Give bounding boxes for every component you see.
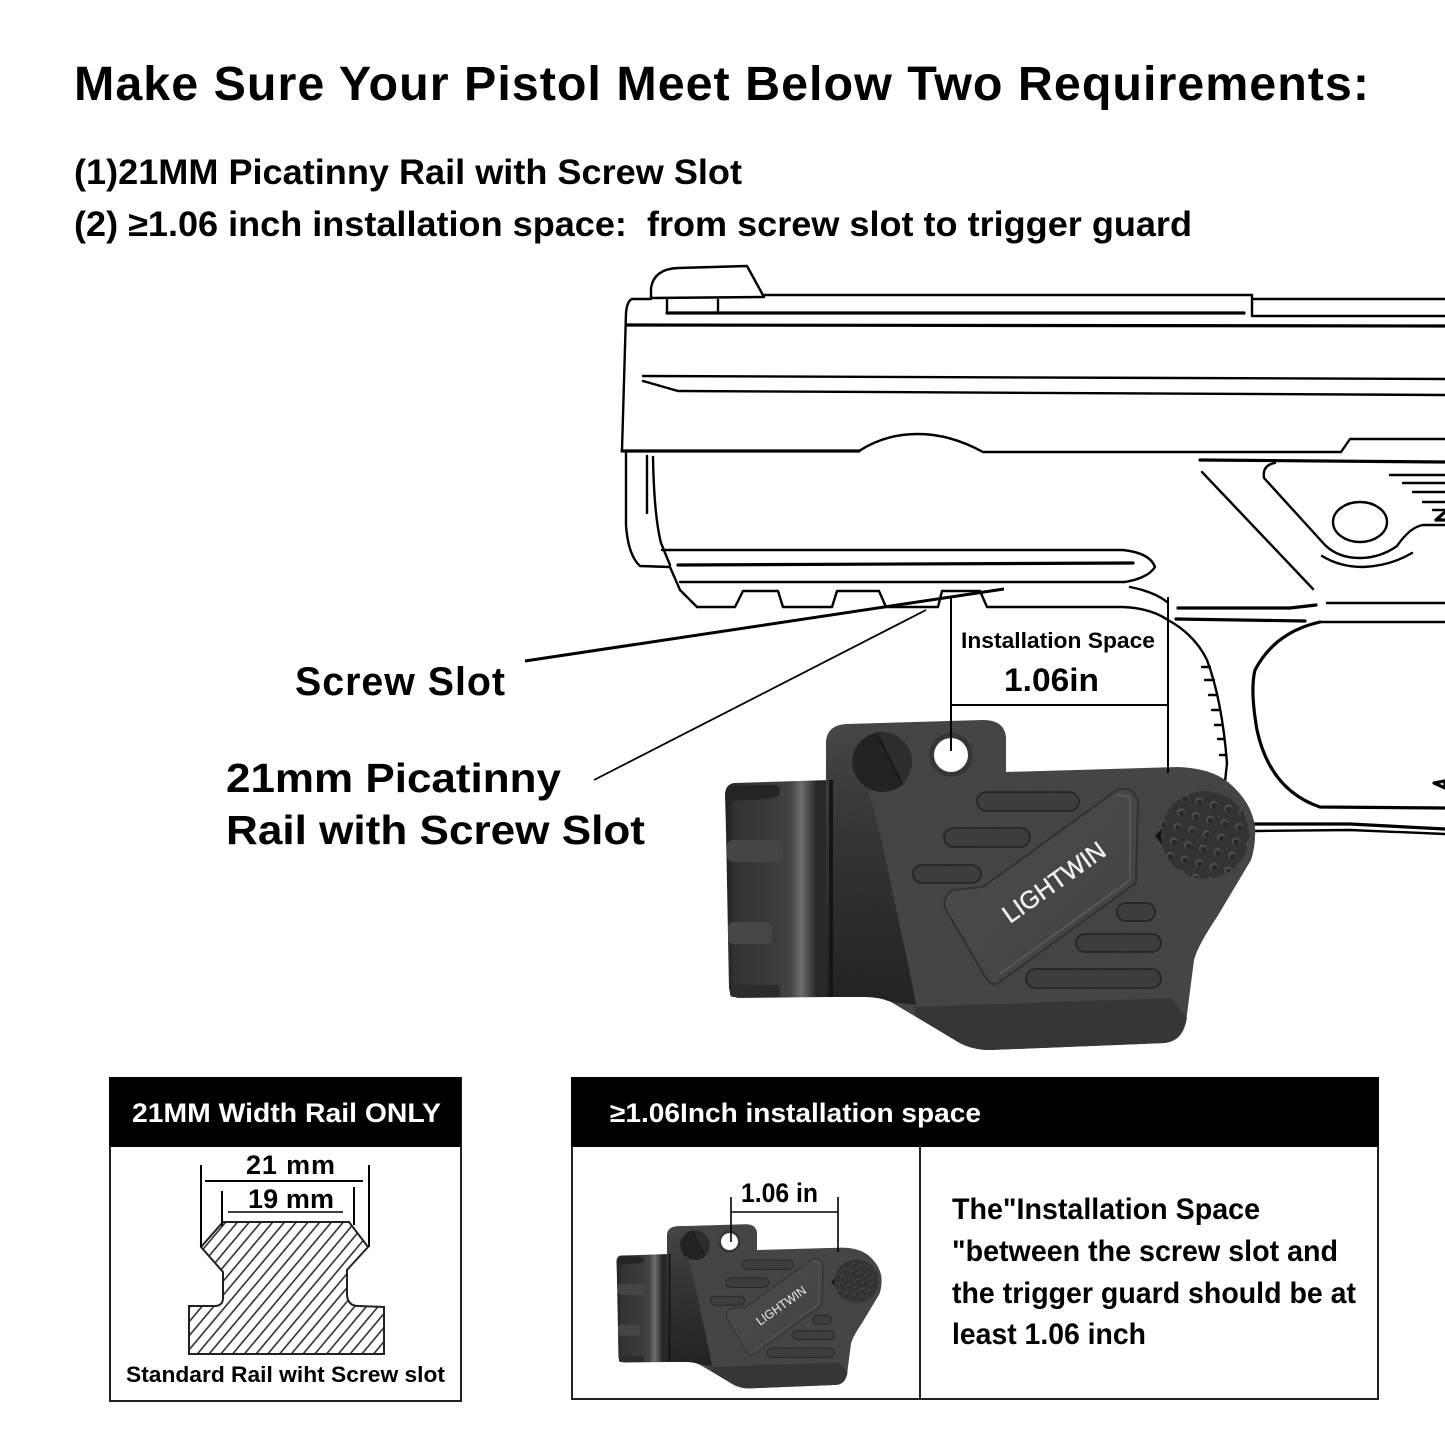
label: 21mm picatinny rail: 21mm Picatinny xyxy=(226,755,561,801)
explanation text: "between the screw slot and xyxy=(952,1235,1338,1268)
explanation text xyxy=(952,1193,1356,1351)
installation space dimension xyxy=(951,597,1168,773)
rear sight xyxy=(651,266,764,312)
panel: installation space xyxy=(571,1077,1379,1399)
weapon light small xyxy=(616,1224,882,1388)
title: Make Sure Your Pistol Meet Below Two Requirements: xyxy=(74,58,1370,111)
panel heading: ≥1.06Inch installation space xyxy=(610,1098,981,1128)
weapon light small: LIGHTWIN xyxy=(754,1283,809,1328)
rail dimensions: 19 mm xyxy=(248,1184,334,1214)
requirement 1: (1)21MM Picatinny Rail with Screw Slot xyxy=(74,153,742,192)
panel: 21mm width rail xyxy=(109,1077,461,1401)
panel heading: 21MM Width Rail ONLY xyxy=(132,1098,441,1128)
installation space dimension: Installation Space xyxy=(961,628,1155,653)
small dimension xyxy=(731,1178,838,1252)
pistol line drawing xyxy=(622,266,1445,834)
label: screw slot: Screw Slot xyxy=(295,660,506,704)
explanation text: The"Installation Space xyxy=(952,1193,1260,1226)
weapon light large xyxy=(725,720,1255,1050)
panel heading xyxy=(109,1077,461,1147)
label: 21mm picatinny rail: Rail with Screw Slot xyxy=(226,807,645,853)
pistol slide xyxy=(622,295,1445,452)
rail dimensions: 21 mm xyxy=(246,1150,335,1180)
installation space dimension: 1.06in xyxy=(1004,662,1099,698)
explanation text: least 1.06 inch xyxy=(952,1318,1146,1351)
explanation text: the trigger guard should be at xyxy=(952,1277,1356,1310)
requirement 2: (2) ≥1.06 inch installation space: from screw slot to trigger guard xyxy=(74,205,1192,244)
rail cross-section xyxy=(189,1222,384,1354)
weapon light large: LIGHTWIN xyxy=(997,836,1111,929)
rail dimensions xyxy=(201,1150,369,1247)
callout line: screw slot xyxy=(525,589,1004,661)
divider xyxy=(919,1147,921,1399)
rail caption: Standard Rail wiht Screw slot xyxy=(126,1362,446,1387)
small dimension: 1.06 in xyxy=(741,1178,818,1208)
panel heading xyxy=(571,1077,1379,1147)
callout line: picatinny rail xyxy=(594,610,926,780)
pistol frame and rail xyxy=(626,451,1445,834)
label: 21mm picatinny rail xyxy=(226,755,645,853)
